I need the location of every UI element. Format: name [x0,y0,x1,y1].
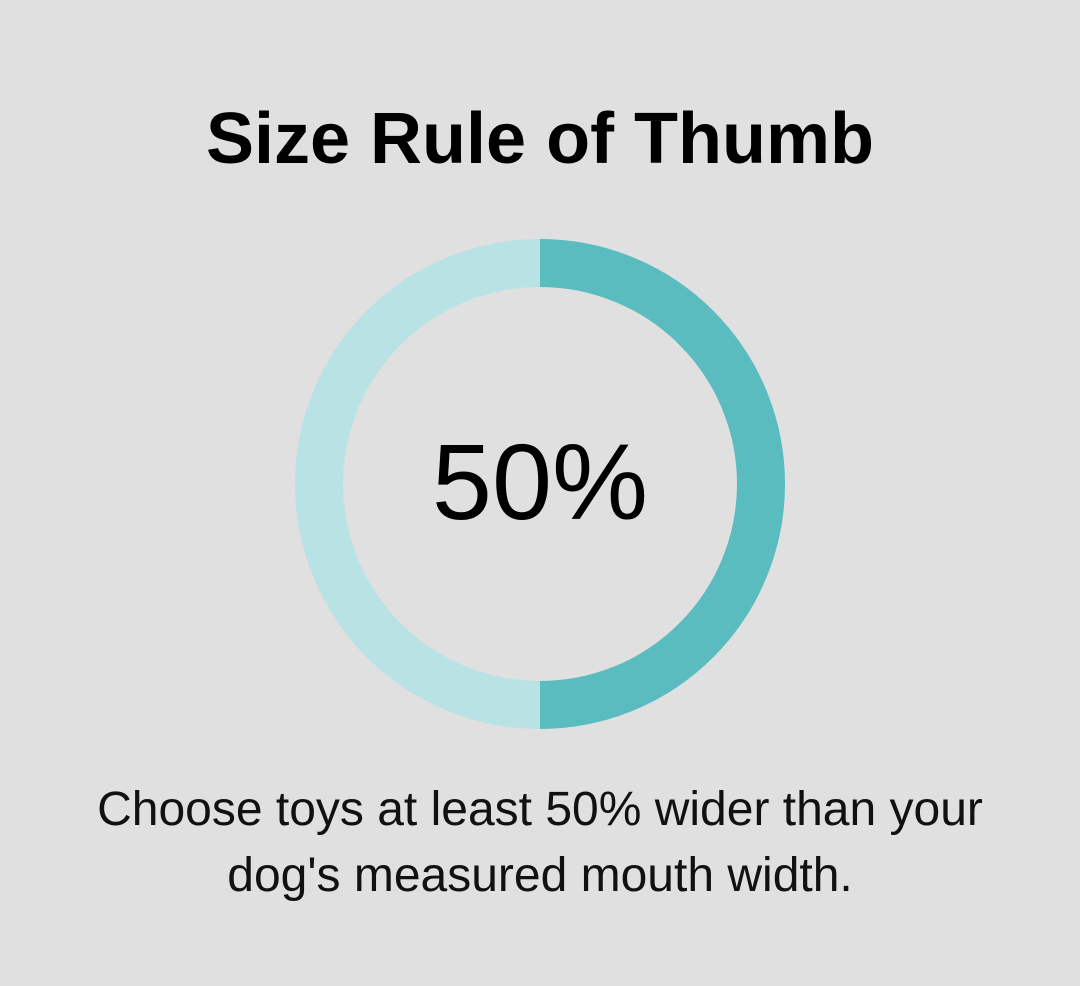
ring: background track [319,263,761,705]
center value: 50% [432,421,648,542]
title: Size Rule of Thumb [206,99,874,179]
ring: 50% segment [540,263,761,705]
caption: Choose toys at least 50% wider than your [97,783,983,836]
caption: dog's measured mouth width. [227,849,853,902]
caption [97,783,983,902]
